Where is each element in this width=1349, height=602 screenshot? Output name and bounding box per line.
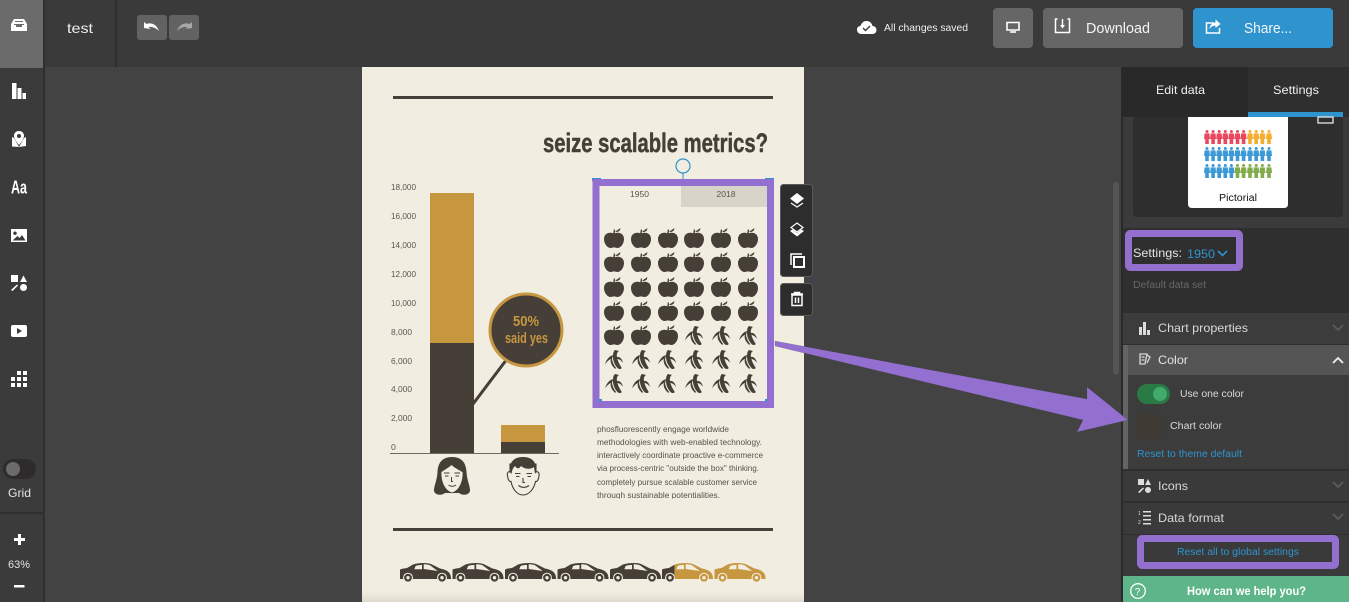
help bar: How can we help you? xyxy=(1187,586,1306,598)
body paragraph: via process-centric "outside the box" thinking. xyxy=(597,463,759,473)
icon: widgets grid xyxy=(11,371,27,387)
highlight: settings dropdown xyxy=(1128,234,1240,268)
help bar xyxy=(1123,576,1349,602)
stacked bar chart: 16,000 xyxy=(391,211,416,221)
body paragraph: methodologies with web-enabled technology. xyxy=(597,437,762,447)
icon: man face xyxy=(507,457,539,495)
section: data format: 2 xyxy=(1138,520,1141,526)
default data set label: Default data set xyxy=(1133,280,1206,291)
tab: 2018 xyxy=(681,186,767,207)
help bar: ? xyxy=(1135,587,1141,598)
poster xyxy=(362,67,804,602)
data set selector: Settings: xyxy=(1133,246,1182,260)
icon: bring forward xyxy=(790,193,804,207)
stacked bar chart: 8,000 xyxy=(391,327,412,337)
section: color: Color xyxy=(1158,353,1188,367)
reset all to global settings: Reset all to global settings xyxy=(1177,547,1299,558)
grid toggle xyxy=(3,459,36,479)
selection frame with purple highlight xyxy=(592,159,774,404)
body paragraph: interactively coordinate proactive e-commerce xyxy=(597,450,763,460)
undo button xyxy=(137,15,167,40)
callout: 50% said yes: said yes xyxy=(505,331,548,347)
body paragraph xyxy=(597,424,763,500)
stacked bar chart: 0 xyxy=(391,442,396,452)
section: chart properties: Chart properties xyxy=(1158,321,1248,335)
icon: shapes xyxy=(11,275,27,291)
toggle: use one color xyxy=(1137,384,1170,404)
poster title: seize scalable metrics? xyxy=(543,128,768,158)
download button xyxy=(1043,8,1183,48)
icon: maps xyxy=(12,131,26,147)
tab: settings xyxy=(1248,67,1349,117)
section: data format: Data format xyxy=(1158,511,1225,525)
save status: All changes saved xyxy=(884,22,968,34)
icon: text: Aa xyxy=(11,178,28,198)
right settings panel xyxy=(1121,67,1349,602)
purple arrow xyxy=(775,341,1128,432)
section: chart properties xyxy=(1123,313,1349,344)
callout: 50% said yes xyxy=(473,294,562,404)
callout: 50% said yes: 50% xyxy=(513,313,539,330)
icon: video xyxy=(11,325,27,337)
chart thumbnail: pictorial xyxy=(1188,117,1288,208)
body paragraph: phosfluorescently engage worldwide xyxy=(597,424,729,434)
left sidebar xyxy=(0,0,45,602)
stacked bar chart: 4,000 xyxy=(391,384,412,394)
highlight: reset button xyxy=(1140,538,1336,566)
monitor button xyxy=(993,8,1033,48)
tab: edit data xyxy=(1123,67,1248,117)
icon: delete xyxy=(791,292,803,306)
icon: charts xyxy=(12,83,26,99)
stacked bar chart: 12,000 xyxy=(391,269,416,279)
download button: Download xyxy=(1086,21,1150,37)
stacked bar chart: 14,000 xyxy=(391,240,416,250)
tab: settings: Settings xyxy=(1273,83,1319,97)
body paragraph: completely pursue scalable customer service xyxy=(597,477,757,487)
stacked bar chart: 2,000 xyxy=(391,413,412,423)
canvas scrollbar xyxy=(1113,182,1119,375)
icon: duplicate xyxy=(791,254,804,267)
section: color xyxy=(1123,345,1349,469)
chart thumbnail: pictorial: Pictorial xyxy=(1219,193,1257,204)
body paragraph: through sustainable potentialities. xyxy=(597,490,720,500)
section: color: Use one color xyxy=(1180,389,1245,400)
data set selector: 1950 xyxy=(1187,247,1215,261)
save status xyxy=(857,21,968,34)
top bar xyxy=(45,0,1349,67)
chart type area xyxy=(1123,117,1349,228)
section: icons xyxy=(1123,471,1349,501)
icon: image xyxy=(11,229,27,242)
apple icons xyxy=(604,228,758,345)
zoom in xyxy=(14,534,25,545)
share button xyxy=(1193,8,1333,48)
banana icons xyxy=(605,326,757,393)
grid label: Grid xyxy=(8,486,31,500)
tab label: 2018: 2018 xyxy=(716,189,736,199)
icon: send backward xyxy=(790,223,804,236)
section: color: Chart color xyxy=(1170,421,1223,432)
stacked bar chart: 18,000 xyxy=(391,182,416,192)
project name: test xyxy=(67,20,93,36)
zoom out xyxy=(14,585,24,588)
stacked bar chart xyxy=(390,182,559,454)
share button: Share... xyxy=(1244,21,1292,37)
zoom level: 63% xyxy=(8,559,30,571)
data set selector xyxy=(1133,246,1227,261)
chart color swatch xyxy=(1137,414,1162,439)
section: icons: Icons xyxy=(1158,479,1188,493)
stacked bar chart: 6,000 xyxy=(391,356,412,366)
section: data format xyxy=(1123,503,1349,534)
object toolbar xyxy=(780,184,812,316)
reset theme link: Reset to theme default xyxy=(1137,449,1242,460)
reset button area xyxy=(1123,535,1349,576)
tab label: 1950: 1950 xyxy=(630,189,649,199)
section: data format: 1 xyxy=(1138,511,1141,517)
tab: edit data: Edit data xyxy=(1156,83,1205,97)
icon: woman face xyxy=(434,457,470,495)
pictorial chart xyxy=(604,186,767,393)
redo button xyxy=(169,15,199,40)
car pictogram row xyxy=(400,563,766,583)
icon: projects tray xyxy=(11,19,27,31)
stacked bar chart: 10,000 xyxy=(391,298,416,308)
